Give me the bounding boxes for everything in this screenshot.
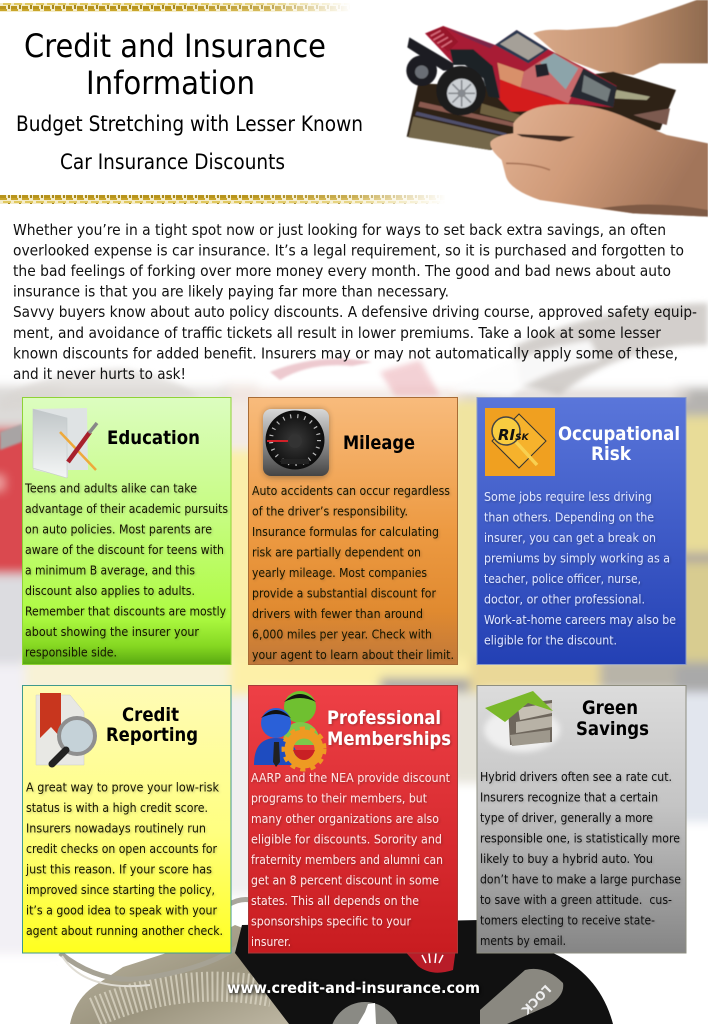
front hand [490, 104, 708, 217]
photo: black car remote fob: LOCK [518, 982, 554, 1017]
panel: occupational risk [477, 398, 686, 664]
heading: Credit [122, 704, 179, 726]
body text: it’s a good idea to speak with your [26, 902, 218, 918]
icon: folder with pen and pencil [33, 408, 97, 478]
intro text [13, 221, 697, 383]
body text: Hybrid drivers often see a rate cut. [480, 769, 672, 784]
body text: insurer. [251, 934, 291, 949]
body text: agent about running another check. [26, 923, 223, 938]
body text: than others. Depending on the [484, 510, 654, 524]
heading [558, 423, 680, 465]
body text: type of driver, generally a more [480, 810, 653, 825]
body text: Insurers nowadays routinely run [26, 820, 206, 836]
icon: risk sign: RISK [498, 426, 530, 444]
background: blurred car photo [0, 303, 708, 954]
back hand [533, 0, 708, 75]
body text: AARP and the NEA provide discount [251, 770, 450, 785]
body text: sponsorships specific to your [251, 914, 412, 928]
subtitle: Budget Stretching with Lesser Known [16, 112, 363, 136]
body text: just this reason. If your score has [25, 862, 212, 876]
body text: yearly mileage. Most companies [252, 565, 427, 580]
body text: responsible side. [25, 644, 117, 660]
wallet [407, 72, 676, 150]
icon: document with magnifier [36, 693, 95, 765]
heading: Memberships [327, 728, 451, 750]
body text: Some jobs require less driving [484, 489, 652, 504]
heading: Mileage [343, 432, 415, 454]
body text: eligible for the discount. [484, 632, 617, 648]
banner: decorative gold band bottom [0, 195, 446, 204]
body text: doctor, or other professional. [484, 592, 645, 606]
body text [480, 769, 681, 948]
body text: your agent to learn about their limit. [252, 647, 454, 662]
icon: green roof house on money [484, 691, 560, 752]
body text: of the driver’s responsibility. [252, 504, 408, 518]
body text: provide a substantial discount for [252, 586, 437, 600]
photo: key ring and key [60, 900, 289, 1024]
body text: A great way to prove your low-risk [26, 780, 220, 794]
body text: many other organizations are also [251, 811, 439, 826]
intro text: insurance is that you are likely paying far more than necessary. [13, 283, 449, 301]
body text: on auto policies. Most parents are [25, 522, 212, 536]
body text: 6,000 miles per year. Check with [252, 626, 432, 642]
body text: risk are partially dependent on [252, 544, 421, 560]
panel: professional memberships [248, 686, 458, 953]
body text: programs to their members, but [251, 790, 427, 806]
body text: get an 8 percent discount in some [251, 872, 439, 888]
body text: a minimum B average, and this [25, 562, 195, 578]
intro text: and it never hurts to ask! [13, 365, 186, 383]
body text [252, 483, 454, 662]
panel: education [22, 398, 231, 664]
body text: eligible for discounts. Sorority and [251, 832, 442, 846]
body text: premiums by simply working as a [484, 550, 670, 566]
body text: about showing the insurer your [25, 624, 200, 639]
subtitle [16, 112, 363, 174]
heading: Reporting [106, 724, 198, 746]
body text [484, 489, 676, 648]
heading: Savings [576, 718, 649, 740]
body text: don’t have to make a large purchase [480, 872, 681, 886]
body text [24, 480, 228, 660]
footer url: www.credit-and-insurance.com [227, 979, 480, 997]
icon: risk sign [485, 408, 555, 476]
panel: mileage [248, 398, 458, 664]
photo: hands squeezing wallet with red jeep [406, 0, 708, 217]
heading [327, 707, 451, 750]
body text: states. This all depends on the [251, 893, 419, 908]
body text: improved since starting the policy, [26, 882, 215, 897]
body text: Insurance formulas for calculating [252, 524, 439, 539]
body text: teacher, police officer, nurse, [484, 571, 641, 586]
body text [251, 770, 450, 949]
body text: aware of the discount for teens with [25, 542, 224, 557]
body text: Teens and adults alike can take [24, 480, 197, 496]
icon: speedometer [263, 409, 329, 478]
body text [25, 780, 223, 938]
body text: Remember that discounts are mostly [25, 604, 226, 618]
body text: to save with a green attitude. cus- [480, 892, 672, 907]
title: Credit and Insurance [24, 27, 326, 65]
body text: credit checks on open accounts for [26, 841, 218, 856]
panel: green savings [477, 686, 686, 953]
banner: decorative gold band top [0, 3, 352, 12]
photo: black car remote fob [235, 920, 613, 1024]
body text: fraternity members and alumni can [251, 852, 443, 867]
body text: advantage of their academic pursuits [25, 501, 228, 516]
body text: responsible one, is statistically more [480, 830, 680, 846]
jeep [406, 26, 617, 115]
body text: discount also applies to adults. [25, 583, 195, 598]
heading: Professional [327, 707, 441, 729]
body text: likely to buy a hybrid auto. You [480, 851, 653, 866]
heading [576, 697, 649, 740]
panel: credit reporting [22, 686, 231, 953]
heading: Education [107, 427, 200, 449]
icon: group of people with gear [254, 691, 324, 769]
subtitle: Car Insurance Discounts [60, 150, 285, 174]
body text: Work-at-home careers may also be [484, 612, 676, 627]
body text: status is with a high credit score. [26, 800, 208, 815]
body text: Auto accidents can occur regardless [252, 483, 450, 498]
body text: drivers with fewer than around [252, 606, 423, 621]
heading [106, 704, 198, 746]
heading: Green [582, 697, 638, 719]
body text: ments by email. [480, 933, 566, 948]
body text: tomers electing to receive state- [480, 912, 655, 928]
title [24, 27, 326, 102]
heading: Risk [591, 443, 631, 465]
title: Information [86, 64, 255, 102]
body text: insurer, you can get a break on [484, 530, 656, 545]
heading: Occupational [558, 423, 680, 445]
body text: Insurers recognize that a certain [480, 790, 658, 804]
